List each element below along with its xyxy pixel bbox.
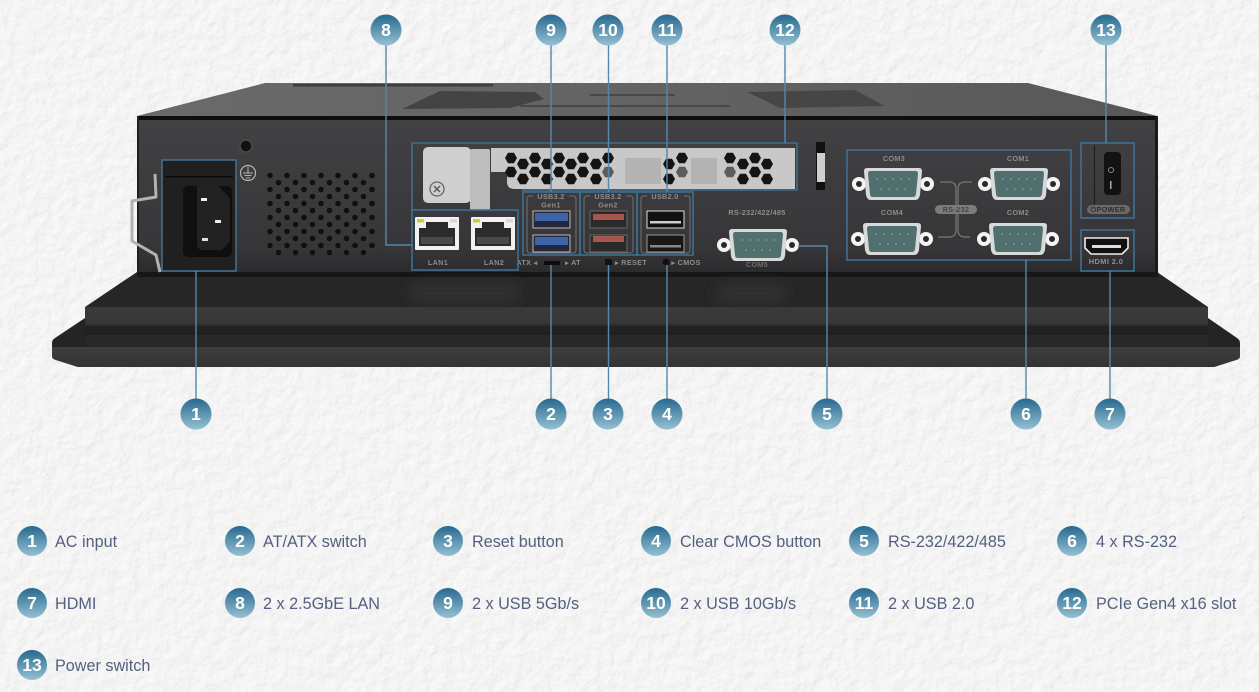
marker 4 <box>652 398 682 430</box>
COM5 serial port: RS-232/422/485 <box>728 208 786 217</box>
legend <box>17 526 1237 680</box>
marker 8: 8 <box>381 20 391 40</box>
marker 9: 9 <box>546 20 556 40</box>
marker 11 <box>652 14 682 46</box>
COM5 serial port <box>717 208 799 269</box>
USB ports: Gen1 <box>541 200 561 210</box>
product: rear of panel PC <box>52 83 1240 367</box>
legend item 13: Power switch <box>55 657 150 675</box>
legend item 2: 2 <box>235 531 245 551</box>
four RS-232 ports: COM1 <box>1007 154 1029 163</box>
marker 3 <box>592 398 624 430</box>
legend item 4: 4 <box>651 531 661 551</box>
power switch <box>1087 145 1130 214</box>
monitor bezel <box>52 318 1240 367</box>
legend item 11 <box>849 588 974 618</box>
legend item 7: HDMI <box>55 595 96 613</box>
side latch <box>816 142 825 190</box>
AC handle <box>132 174 160 272</box>
switches and buttons labels: ATX ◂ <box>516 258 538 267</box>
marker 2: 2 <box>546 404 556 424</box>
legend item 3: 3 <box>443 531 453 551</box>
legend item 1 <box>17 526 118 556</box>
power switch: ⏻POWER <box>1091 205 1126 214</box>
legend item 3 <box>433 526 564 556</box>
four RS-232 ports: COM2 <box>1007 208 1029 217</box>
legend item 8: 2 x 2.5GbE LAN <box>263 595 380 613</box>
marker 12 <box>770 14 800 46</box>
ventilation holes <box>266 172 378 256</box>
marker 1 <box>180 398 212 430</box>
AC input socket <box>162 160 236 271</box>
legend item 12: 12 <box>1062 593 1082 613</box>
leader lines <box>196 30 1110 414</box>
marker 10 <box>592 14 624 46</box>
marker 7 <box>1094 398 1126 430</box>
switches and buttons labels: ▸ RESET <box>614 258 647 267</box>
legend item 6 <box>1057 526 1177 556</box>
rear housing base <box>85 272 1208 346</box>
legend item 7: 7 <box>27 593 37 613</box>
legend item 5 <box>849 526 1006 556</box>
USB ports: USB3.2 <box>537 192 565 201</box>
legend item 13: 13 <box>22 655 42 675</box>
highlight boxes <box>162 143 1134 271</box>
switches and buttons labels: ▸ AT <box>564 258 581 267</box>
marker 9 <box>536 14 566 46</box>
marker 12: 12 <box>775 20 795 40</box>
marker 13: 13 <box>1096 20 1116 40</box>
legend item 10: 10 <box>646 593 666 613</box>
legend item 2: AT/ATX switch <box>263 533 367 551</box>
chassis top <box>137 83 1157 116</box>
four RS-232 ports <box>851 154 1060 255</box>
four RS-232 ports: RS-232 <box>943 205 969 214</box>
switches and buttons labels <box>516 258 701 267</box>
HDMI port: HDMI 2.0 <box>1089 257 1123 266</box>
legend item 12 <box>1057 588 1237 618</box>
legend item 6: 4 x RS-232 <box>1096 533 1177 551</box>
chassis back panel <box>137 116 1158 272</box>
marker 4: 4 <box>662 404 672 424</box>
USB ports: USB3.2 <box>594 192 622 201</box>
legend item 8 <box>225 588 380 618</box>
legend item 9 <box>433 588 579 618</box>
legend item 5: 5 <box>859 531 869 551</box>
legend item 7 <box>17 588 96 618</box>
legend item 3: Reset button <box>472 533 564 551</box>
legend item 9: 2 x USB 5Gb/s <box>472 595 579 613</box>
COM5 serial port: COM5 <box>746 260 768 269</box>
legend item 4: Clear CMOS button <box>680 533 821 551</box>
legend item 9: 9 <box>443 593 453 613</box>
LAN ports: LAN2 <box>484 258 504 267</box>
marker 13 <box>1090 14 1122 46</box>
legend item 11: 11 <box>855 593 874 613</box>
marker 5 <box>812 398 842 430</box>
marker 8 <box>370 14 402 46</box>
legend item 4 <box>641 526 821 556</box>
HDMI port <box>1085 238 1128 266</box>
USB ports: USB2.0 <box>651 192 679 201</box>
legend item 10 <box>641 588 796 618</box>
marker 3: 3 <box>603 404 613 424</box>
legend item 13 <box>17 650 150 680</box>
USB ports <box>527 192 690 253</box>
legend item 12: PCIe Gen4 x16 slot <box>1096 595 1237 613</box>
marker 6: 6 <box>1021 404 1031 424</box>
legend item 1: 1 <box>27 531 37 551</box>
legend item 2 <box>225 526 367 556</box>
four RS-232 ports: COM3 <box>883 154 905 163</box>
PCIe bracket <box>423 147 795 210</box>
callout markers on photo <box>180 14 1126 430</box>
marker 2 <box>536 398 566 430</box>
LAN ports <box>415 217 515 267</box>
marker 1: 1 <box>191 404 201 424</box>
icon: ground screw and symbol <box>240 140 256 180</box>
USB ports: Gen2 <box>598 200 618 210</box>
legend item 6: 6 <box>1067 531 1077 551</box>
legend item 11: 2 x USB 2.0 <box>888 595 974 613</box>
switches and buttons labels: ▸ CMOS <box>670 258 701 267</box>
marker 7: 7 <box>1105 404 1115 424</box>
legend item 5: RS-232/422/485 <box>888 533 1006 551</box>
marker 6 <box>1010 398 1042 430</box>
marker 5: 5 <box>822 404 832 424</box>
legend item 8: 8 <box>235 593 245 613</box>
marker 10: 10 <box>598 20 618 40</box>
legend item 1: AC input <box>55 533 118 551</box>
LAN ports: LAN1 <box>428 258 448 267</box>
marker 11: 11 <box>658 20 677 40</box>
four RS-232 ports: COM4 <box>881 208 903 217</box>
legend item 10: 2 x USB 10Gb/s <box>680 595 796 613</box>
